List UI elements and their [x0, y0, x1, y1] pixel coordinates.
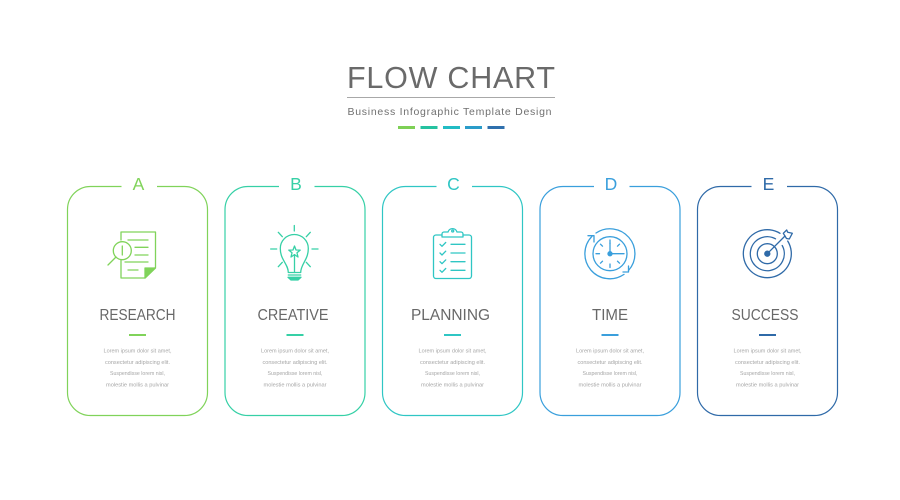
underline	[129, 334, 146, 336]
letter C: C	[447, 174, 460, 194]
body text: consectetur adipiscing elit.	[262, 360, 328, 366]
body text: Suspendisse lorem nisl,	[740, 371, 795, 377]
title: FLOW CHART	[347, 61, 555, 95]
body text: Lorem ipsum dolor sit amet,	[261, 348, 329, 354]
body text	[261, 348, 329, 388]
body text: Lorem ipsum dolor sit amet,	[418, 348, 486, 354]
body text: molestie mollis a pulvinar	[421, 382, 484, 388]
body text	[104, 348, 172, 388]
body text: consectetur adipiscing elit.	[578, 360, 642, 366]
body text: Suspendisse lorem nisl,	[110, 371, 165, 377]
body text: molestie mollis a pulvinar	[264, 382, 327, 388]
body text: Lorem ipsum dolor sit amet,	[734, 348, 802, 354]
icon: clock with arrows	[585, 229, 635, 279]
body text: consectetur adipiscing elit.	[735, 360, 800, 366]
body text: Suspendisse lorem nisl,	[582, 371, 638, 377]
body text: molestie mollis a pulvinar	[106, 382, 169, 388]
body text	[734, 348, 802, 388]
body text: molestie mollis a pulvinar	[578, 382, 642, 388]
heading: time: TIME	[592, 307, 628, 324]
icon: document with magnifier	[108, 232, 156, 278]
panel: time	[540, 174, 680, 416]
heading: planning: PLANNING	[411, 307, 490, 324]
panel: planning	[382, 174, 522, 416]
letter D: D	[605, 174, 617, 194]
letter B: B	[290, 174, 302, 194]
panel: research	[68, 174, 208, 416]
body text: Suspendisse lorem nisl,	[425, 371, 480, 377]
heading: success: SUCCESS	[732, 307, 798, 324]
underline	[602, 334, 618, 336]
underline	[286, 334, 304, 336]
panel: creative	[225, 174, 365, 416]
letter E: E	[763, 174, 774, 194]
colour key dashes	[398, 126, 504, 129]
icon: clipboard checklist	[434, 229, 472, 278]
panel: success	[698, 174, 838, 416]
heading: research: RESEARCH	[100, 307, 176, 324]
underline	[759, 334, 776, 336]
underline	[444, 334, 461, 336]
body text	[576, 348, 644, 388]
body text: consectetur adipiscing elit.	[420, 360, 485, 366]
body text: molestie mollis a pulvinar	[736, 382, 799, 388]
letter A: A	[133, 174, 145, 194]
heading: creative: CREATIVE	[258, 307, 328, 324]
icon: target with arrow	[743, 230, 792, 278]
body text	[418, 348, 486, 388]
subtitle: Business Infographic Template Design	[348, 106, 552, 118]
body text: Lorem ipsum dolor sit amet,	[104, 348, 172, 354]
body text: Suspendisse lorem nisl,	[268, 371, 322, 377]
body text: consectetur adipiscing elit.	[105, 360, 170, 366]
icon: light bulb with star	[271, 226, 318, 280]
body text: Lorem ipsum dolor sit amet,	[576, 348, 644, 354]
